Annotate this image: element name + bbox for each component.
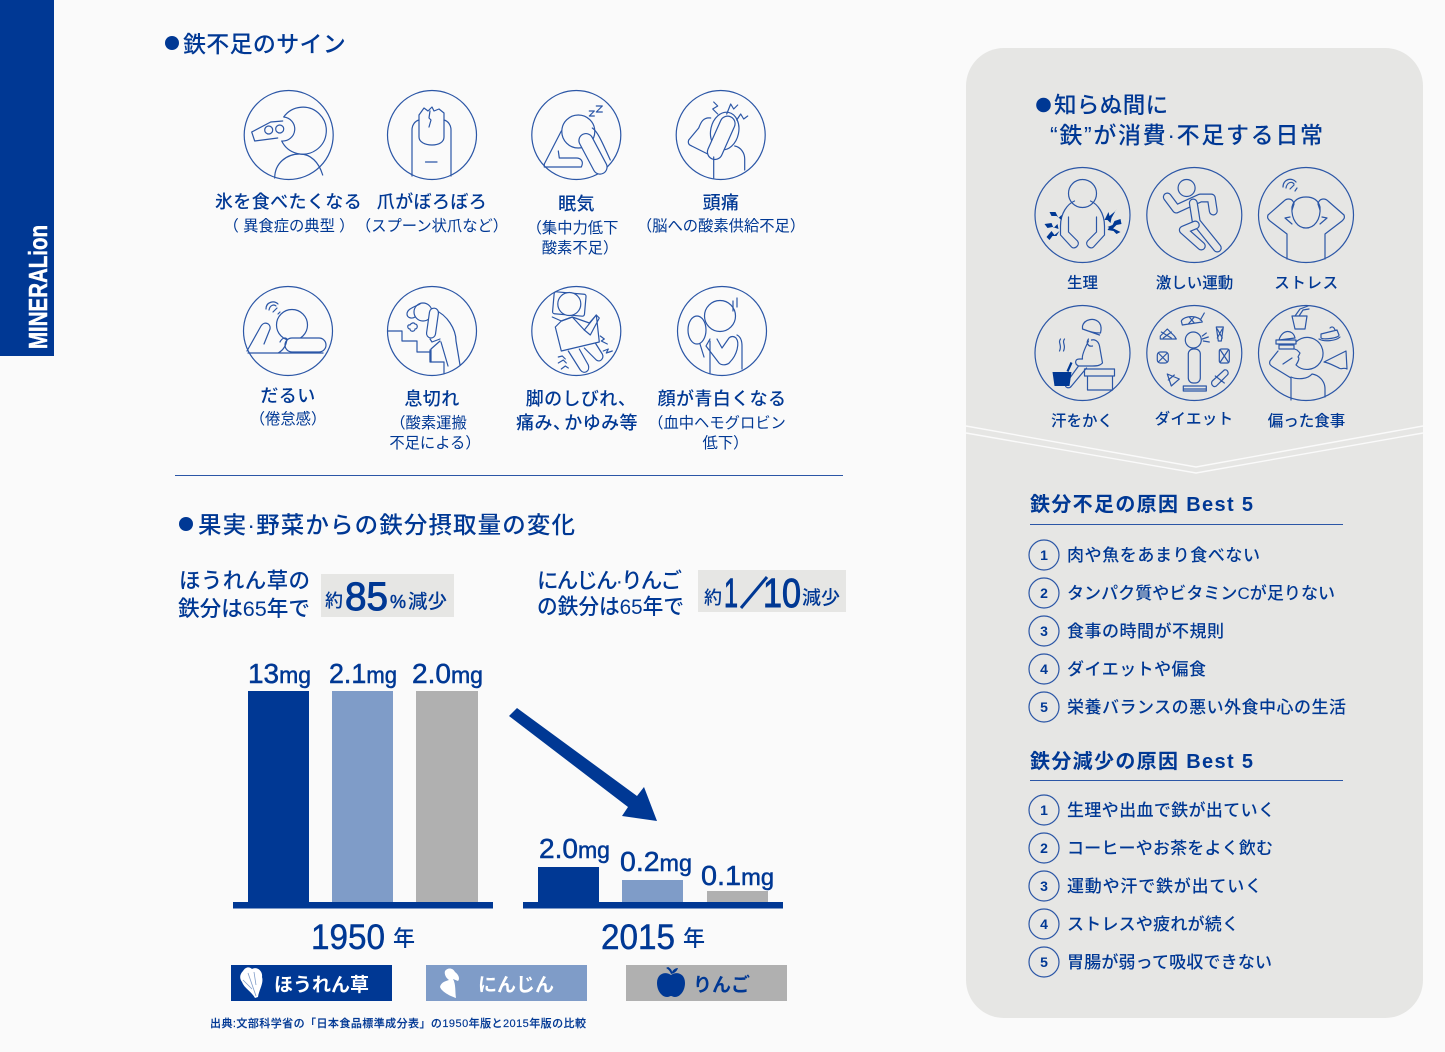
label: pale face: 顔が青白くなる xyxy=(658,388,786,409)
label: drowsy: 眠気 xyxy=(558,194,595,214)
label: sluggish: （倦怠感） xyxy=(250,411,326,428)
text: carrot and apple reduction: にんじん·りんご xyxy=(537,569,682,593)
label: diet: ダイエット xyxy=(1155,409,1233,428)
bar chart: 2015: 2.0mg xyxy=(539,833,610,864)
label: pale face: 低下） xyxy=(703,435,748,452)
callout: about one tenth: 1 xyxy=(724,570,738,616)
list: causes of iron deficiency: 肉や魚をあまり食べない xyxy=(1067,545,1260,565)
label: leg numbness: 痛み、かゆみ等 xyxy=(516,413,638,433)
bar chart: 2015: 0.2mg xyxy=(620,846,692,877)
legend: carrot xyxy=(426,965,587,1001)
list: causes of iron loss: 3 xyxy=(1040,878,1048,894)
icon: intense exercise xyxy=(1147,168,1242,262)
heading: iron deficiency signs: 鉄不足のサイン xyxy=(183,31,346,57)
list: causes of iron loss: 2 xyxy=(1040,840,1048,856)
label: headache: 頭痛 xyxy=(703,193,739,213)
bar chart: 2015: 年 xyxy=(683,926,705,951)
label: short of breath: 息切れ xyxy=(404,388,460,409)
legend: apple xyxy=(626,965,787,1001)
list: causes of iron deficiency: 4 xyxy=(1040,661,1048,677)
label: nail: 爪がぼろぼろ xyxy=(377,191,487,212)
icon: menstruation xyxy=(1035,168,1130,262)
callout: about one tenth: 10 xyxy=(763,570,801,616)
label: pale face: （血中ヘモグロビン xyxy=(648,415,786,432)
heading: causes of iron deficiency: 鉄分不足の原因 Best 5 xyxy=(1030,493,1253,516)
list: causes of iron loss: 運動や汗で鉄が出ていく xyxy=(1067,876,1262,896)
label: sluggish: だるい xyxy=(260,386,316,406)
label: sluggish xyxy=(250,386,326,428)
list: causes of iron deficiency: 3 xyxy=(1040,623,1048,639)
bar chart: 2015: 0.1mg xyxy=(701,860,774,891)
panel: hidden causes xyxy=(966,48,1423,1018)
text: carrot and apple reduction: の鉄分は65年で xyxy=(537,595,684,619)
label: ice xyxy=(215,192,362,235)
text: spinach reduction: 鉄分は65年で xyxy=(178,597,310,621)
bar chart: 1950: 2.1mg xyxy=(329,658,397,689)
label: sweating: 汗をかく xyxy=(1051,412,1113,430)
panel heading xyxy=(1036,93,1323,148)
callout: about one tenth: 約 xyxy=(704,588,722,608)
label: intense exercise: 激しい運動 xyxy=(1156,274,1233,292)
panel heading: 知らぬ間に xyxy=(1054,93,1169,118)
callout: about 85 percent xyxy=(321,574,454,619)
text: spinach reduction xyxy=(178,569,310,621)
panel heading: “鉄”が消費·不足する日常 xyxy=(1050,122,1323,148)
callout: about one tenth xyxy=(698,570,846,616)
legend: carrot: にんじん xyxy=(478,975,554,996)
icon: headache xyxy=(676,90,765,180)
callout: about 85 percent: % xyxy=(390,592,406,612)
bar chart: 1950: 13mg xyxy=(248,658,311,689)
list: causes of iron loss: 胃腸が弱って吸収できない xyxy=(1067,952,1272,972)
label: short of breath xyxy=(389,388,481,452)
label: headache: （脳への酸素供給不足） xyxy=(637,218,805,235)
bar chart: 2015 xyxy=(523,833,783,957)
label: nail: （スプーン状爪など） xyxy=(356,218,508,235)
icon: unbalanced diet xyxy=(1258,306,1354,400)
bar chart: 1950 xyxy=(233,658,493,957)
label: pale face xyxy=(648,388,786,452)
list: causes of iron deficiency: 5 xyxy=(1040,699,1048,715)
label: nail xyxy=(356,191,508,235)
callout: about 85 percent: 約 xyxy=(325,591,343,611)
callout: about 85 percent: 減少 xyxy=(408,591,447,613)
list: causes of iron loss: ストレスや疲れが続く xyxy=(1067,914,1239,934)
icon: ice eating xyxy=(244,90,333,180)
list: causes of iron deficiency xyxy=(1029,540,1346,722)
label: short of breath: 不足による） xyxy=(389,435,481,452)
legend: apple: りんご xyxy=(693,973,750,996)
icon: diet xyxy=(1147,306,1242,400)
list: causes of iron loss: 生理や出血で鉄が出ていく xyxy=(1067,800,1275,820)
list: causes of iron deficiency: タンパク質やビタミンCが足りない xyxy=(1067,583,1335,603)
list: causes of iron deficiency: 食事の時間が不規則 xyxy=(1067,621,1224,641)
legend: spinach xyxy=(231,965,392,1001)
bar chart: 2015: 2015 xyxy=(601,918,675,957)
label: leg numbness: 脚のしびれ、 xyxy=(526,389,636,409)
label: menstruation: 生理 xyxy=(1067,274,1098,292)
text: spinach reduction: ほうれん草の xyxy=(179,569,310,593)
list: causes of iron deficiency: 2 xyxy=(1040,585,1048,601)
label: unbalanced diet: 偏った食事 xyxy=(1268,412,1345,430)
bar chart: 1950: 年 xyxy=(393,926,415,951)
label: headache xyxy=(637,193,805,235)
label: drowsy: （集中力低下 xyxy=(527,220,618,237)
list: causes of iron loss: 4 xyxy=(1040,916,1048,932)
callout: about one tenth: 減少 xyxy=(802,587,840,609)
label: leg numbness xyxy=(516,389,638,433)
label: ice: 氷を食べたくなる xyxy=(215,192,362,212)
icon: pale face xyxy=(678,286,766,376)
icon: drowsy xyxy=(532,90,621,180)
legend: spinach: ほうれん草 xyxy=(274,974,369,996)
bar chart: 1950: 1950 xyxy=(311,918,385,957)
list: causes of iron deficiency: 栄養バランスの悪い外食中心の生活 xyxy=(1067,698,1346,717)
icon: sweating xyxy=(1035,306,1130,400)
label: stress: ストレス xyxy=(1274,275,1339,292)
heading: iron intake change: 果実·野菜からの鉄分摂取量の変化 xyxy=(198,512,575,538)
icon: sluggish xyxy=(244,286,332,376)
source note: 出典:文部科学省の「日本食品標準成分表」の1950年版と2015年版の比較 xyxy=(210,1016,586,1030)
brand sidebar: MINERALion xyxy=(23,225,53,349)
list: causes of iron loss xyxy=(1029,795,1275,977)
label: ice: （ 異食症の典型 ） xyxy=(224,218,354,235)
label: drowsy xyxy=(527,194,618,257)
icon: leg numbness xyxy=(532,286,621,376)
icon: stress xyxy=(1258,168,1354,262)
bar chart: 1950: 2.0mg xyxy=(412,658,483,689)
list: causes of iron loss: 5 xyxy=(1040,954,1048,970)
callout: about 85 percent: 85 xyxy=(345,575,388,619)
text: carrot and apple reduction xyxy=(537,569,684,619)
icon: nail xyxy=(388,90,476,180)
list: causes of iron loss: 1 xyxy=(1040,802,1048,818)
brand sidebar xyxy=(0,0,54,356)
arrow: decrease xyxy=(509,708,657,821)
label: short of breath: （酸素運搬 xyxy=(390,415,467,432)
list: causes of iron deficiency: 1 xyxy=(1040,547,1048,563)
list: causes of iron deficiency: ダイエットや偏食 xyxy=(1067,659,1206,679)
list: causes of iron loss: コーヒーやお茶をよく飲む xyxy=(1067,839,1273,858)
heading: causes of iron loss: 鉄分減少の原因 Best 5 xyxy=(1030,749,1253,773)
label: drowsy: 酸素不足） xyxy=(542,240,618,257)
icon: short of breath xyxy=(388,286,476,376)
